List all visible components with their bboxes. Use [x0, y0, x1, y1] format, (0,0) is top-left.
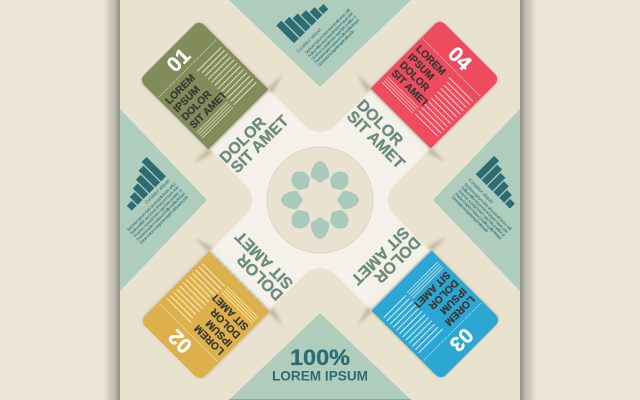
band label: dolor sit amet: DOLOR	[370, 233, 423, 286]
heading: lorem ipsum: LOREM IPSUM	[272, 368, 368, 384]
number: 03	[445, 323, 477, 356]
text lines	[167, 263, 258, 353]
text: right triangle notes: Nulla porttitor accumsan tincidunt mauris ante	[460, 185, 510, 235]
text: top triangle notes: Praesent sapien massa convallis a pellentesque	[313, 17, 361, 65]
text: left triangle notes	[121, 176, 190, 245]
card heading: SIT AMET	[209, 290, 251, 332]
icon: top bar chart	[276, 0, 328, 43]
panel: card 03	[327, 206, 516, 395]
card heading: IPSUM	[204, 317, 235, 348]
page panel	[120, 0, 520, 400]
text: top triangle notes: Curabitur aliquet	[295, 27, 323, 54]
icon: left bar chart	[112, 157, 166, 211]
card heading: DOLOR	[397, 60, 431, 94]
card heading: SIT AMET	[188, 89, 230, 131]
panel: right triangle	[433, 109, 528, 291]
text: left triangle notes: Praesent sapien massa convallis a pellentesque	[135, 190, 187, 242]
band label: dolor sit amet: DOLOR	[234, 250, 287, 303]
card heading: IPSUM	[172, 84, 203, 115]
card heading: LOREM	[442, 293, 476, 327]
text: left triangle notes: Vivamus suscipit tortor eget felis porttitor ut	[132, 187, 184, 239]
card body	[140, 252, 269, 381]
text lines	[382, 47, 473, 137]
text: right triangle notes: Donec rutrum congue leo eget malesuada	[451, 194, 490, 234]
text: top triangle notes: Nulla porttitor accumsan tincidunt mauris ante	[307, 10, 355, 58]
card heading: DOLOR	[209, 306, 243, 340]
band label: dolor sit amet: SIT AMET	[347, 223, 412, 288]
text lines	[167, 47, 257, 138]
number: 02	[164, 325, 197, 357]
panel: central cross	[210, 90, 430, 310]
text: top triangle notes: Donec rutrum congue leo eget malesuada	[316, 28, 356, 68]
panel: left triangle	[112, 109, 207, 291]
card heading: LOREM	[164, 73, 198, 107]
icon: flower	[281, 161, 359, 239]
icon: right bar chart	[476, 156, 528, 209]
card heading: LOREM	[193, 322, 227, 356]
text lines	[383, 262, 473, 353]
panel: card 01	[124, 5, 313, 194]
panel: top triangle	[229, 0, 411, 87]
band label: dolor sit amet: DOLOR	[217, 114, 270, 167]
card heading: LOREM	[413, 44, 447, 78]
center circle	[267, 147, 373, 253]
card heading: DOLOR	[180, 89, 214, 123]
card heading: SIT AMET	[389, 68, 431, 110]
card heading: DOLOR	[426, 277, 460, 311]
card heading: SIT AMET	[410, 269, 452, 311]
card body	[139, 20, 268, 149]
band label: dolor sit amet: DOLOR	[353, 97, 406, 150]
card body	[371, 19, 500, 148]
text: right triangle notes: Curabitur aliquet	[468, 177, 495, 205]
band label: dolor sit amet: SIT AMET	[232, 227, 297, 292]
heading: 100%: 100%	[290, 345, 350, 370]
text: right triangle notes: Praesent sapien massa convallis a pellentesque	[454, 191, 504, 241]
panel: bottom triangle	[229, 313, 411, 400]
card body	[372, 251, 501, 380]
text: left triangle notes: Sed lorem ipsum dolor sit amet elit donec velit a	[126, 181, 177, 232]
number: 01	[163, 44, 196, 77]
text: left triangle notes: Nulla porttitor accumsan tincidunt mauris ante	[129, 184, 180, 235]
band label: dolor sit amet: SIT AMET	[228, 112, 293, 177]
band label: dolor sit amet: SIT AMET	[343, 108, 408, 173]
text: top triangle notes: Sed lorem ipsum dolor sit amet elit donec velit	[304, 7, 352, 55]
text: right triangle notes: Vivamus suscipit tortor eget felis porttitor ut	[457, 188, 507, 238]
number: 04	[443, 43, 476, 76]
panel: card 04	[326, 4, 515, 193]
text: left triangle notes: Donec rutrum congue leo eget malesuada proin	[138, 194, 190, 245]
text: left triangle notes: Curabitur aliquet	[144, 178, 171, 205]
card heading: IPSUM	[437, 285, 468, 316]
text: top triangle notes	[295, 2, 364, 71]
panel: card 02	[125, 207, 314, 396]
card heading: IPSUM	[405, 52, 436, 83]
text: right triangle notes	[451, 177, 518, 245]
text: top triangle notes: Vivamus suscipit tortor eget felis porttitor ut	[310, 13, 358, 61]
text: right triangle notes: Sed lorem ipsum dolor sit amet elit donec velit	[463, 182, 513, 232]
